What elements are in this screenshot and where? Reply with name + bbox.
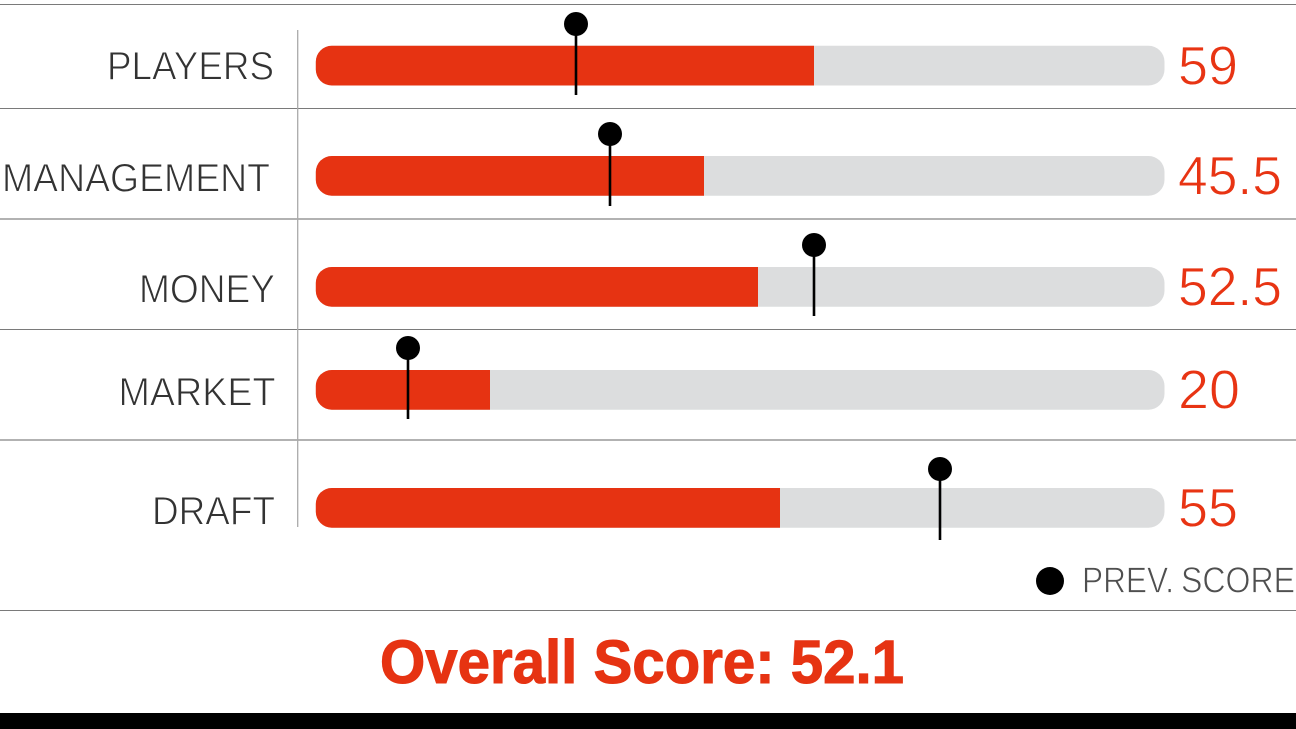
row: players: PLAYERS	[107, 44, 274, 88]
row: management: 45.5	[1178, 144, 1282, 206]
footer bar	[0, 713, 1296, 729]
row: management: MANAGEMENT	[2, 156, 270, 200]
row: draft	[152, 457, 1238, 540]
legend: previous score	[1036, 560, 1295, 600]
row: market: MARKET	[118, 370, 276, 414]
row: market: 20	[1178, 358, 1240, 420]
row: market	[118, 336, 1240, 420]
row: players	[107, 12, 1238, 96]
row: draft: DRAFT	[152, 490, 275, 534]
row: draft: 55	[1178, 476, 1238, 538]
row: money: MONEY	[139, 268, 275, 312]
row: money: 52.5	[1178, 256, 1282, 318]
row: players: 59	[1178, 34, 1238, 96]
overall score: Overall Score: 52.1	[380, 628, 904, 696]
row: money	[139, 233, 1282, 318]
row: management	[2, 122, 1282, 206]
legend: previous score: PREV.	[1082, 560, 1174, 600]
